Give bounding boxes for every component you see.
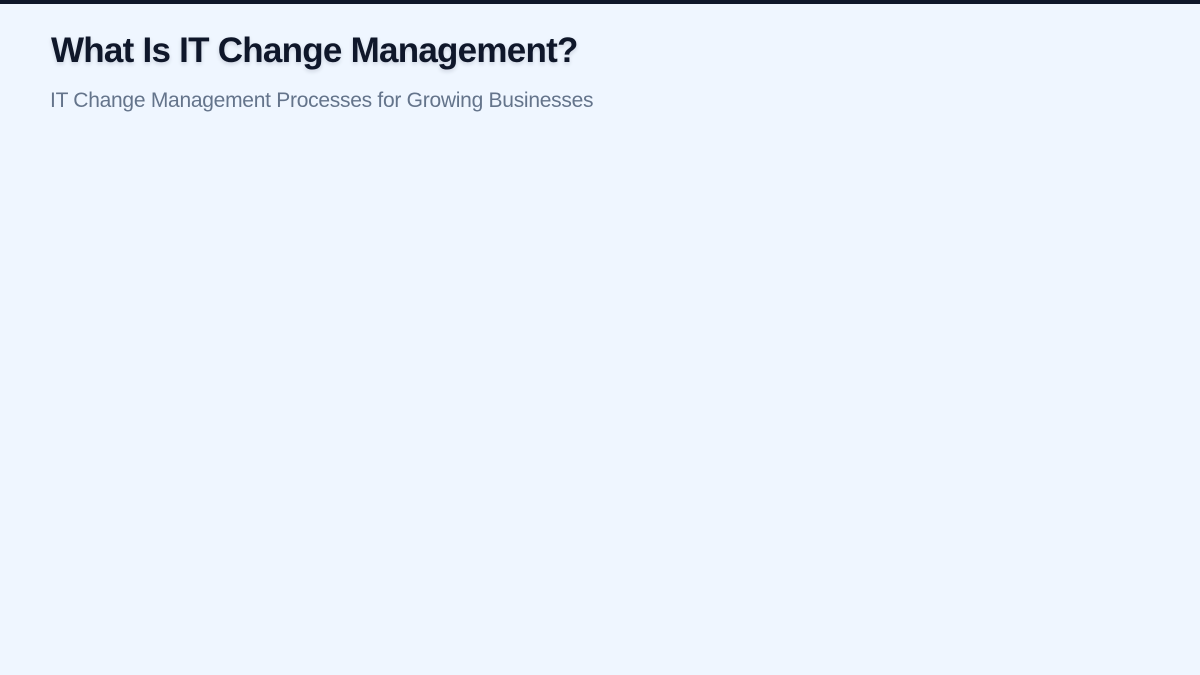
title: What Is IT Change Management? xyxy=(51,31,578,70)
top bar xyxy=(0,0,1200,4)
subtitle: IT Change Management Processes for Growing Businesses xyxy=(50,89,593,112)
